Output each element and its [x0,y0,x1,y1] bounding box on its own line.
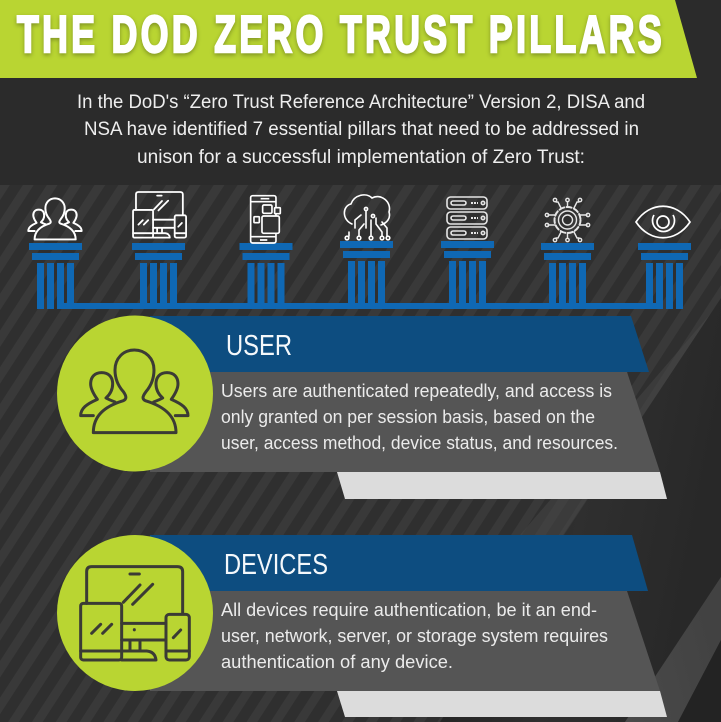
icon: eye [636,206,690,238]
panel: user [57,316,667,499]
connecting bar [57,303,663,309]
diagonal light band [625,577,721,722]
devices heading: DEVICES [224,549,328,581]
pillar 7 [638,243,691,309]
bottom right dark corner [678,640,721,722]
intro text [77,92,645,168]
striped background band [0,185,721,722]
user circle [57,316,213,472]
dark diagonal panel [440,298,721,722]
panel: devices [57,535,667,717]
pillar 3 [240,243,292,309]
pillar 6 [541,243,594,309]
pillar 4 [340,241,393,309]
devices description background [150,591,660,691]
user heading: USER [226,330,292,362]
intro text: unison for a successful implementation of Zero Trust: [137,147,585,168]
light strip [337,691,667,717]
devices text: authentication of any device. [221,651,453,672]
user text [221,380,618,453]
intro text: In the DoD's “Zero Trust Reference Architecture” Version 2, DISA and [77,92,645,113]
devices text: user, network, server, or storage system requires [221,625,608,646]
icon: servers [447,197,487,239]
user text: only granted on per session basis, based on the [221,406,595,427]
devices text: All devices require authentication, be it an end- [221,599,597,620]
lighter diagonal band [520,312,712,535]
icon: network cloud [344,195,390,240]
icon: devices [133,192,186,238]
icon: users large [81,350,188,433]
title banner [0,0,697,78]
pillar 5 [441,241,494,309]
devices text [221,599,608,672]
pillar 2 [132,243,185,309]
icon: gear circuit [545,198,590,242]
devices circle [57,535,213,691]
user text: Users are authenticated repeatedly, and access is [221,380,612,401]
pillars row [29,241,691,309]
user text: user, access method, device status, and resources. [221,432,618,453]
icon: applications [251,196,280,243]
user header bar [150,316,649,372]
pillar 1 [29,243,82,309]
intro text: NSA have identified 7 essential pillars that need to be addressed in [84,119,639,140]
icon: users [28,198,82,239]
light strip [337,472,667,499]
icon: devices large [81,567,189,660]
devices header bar [150,535,648,591]
user description background [150,372,660,472]
